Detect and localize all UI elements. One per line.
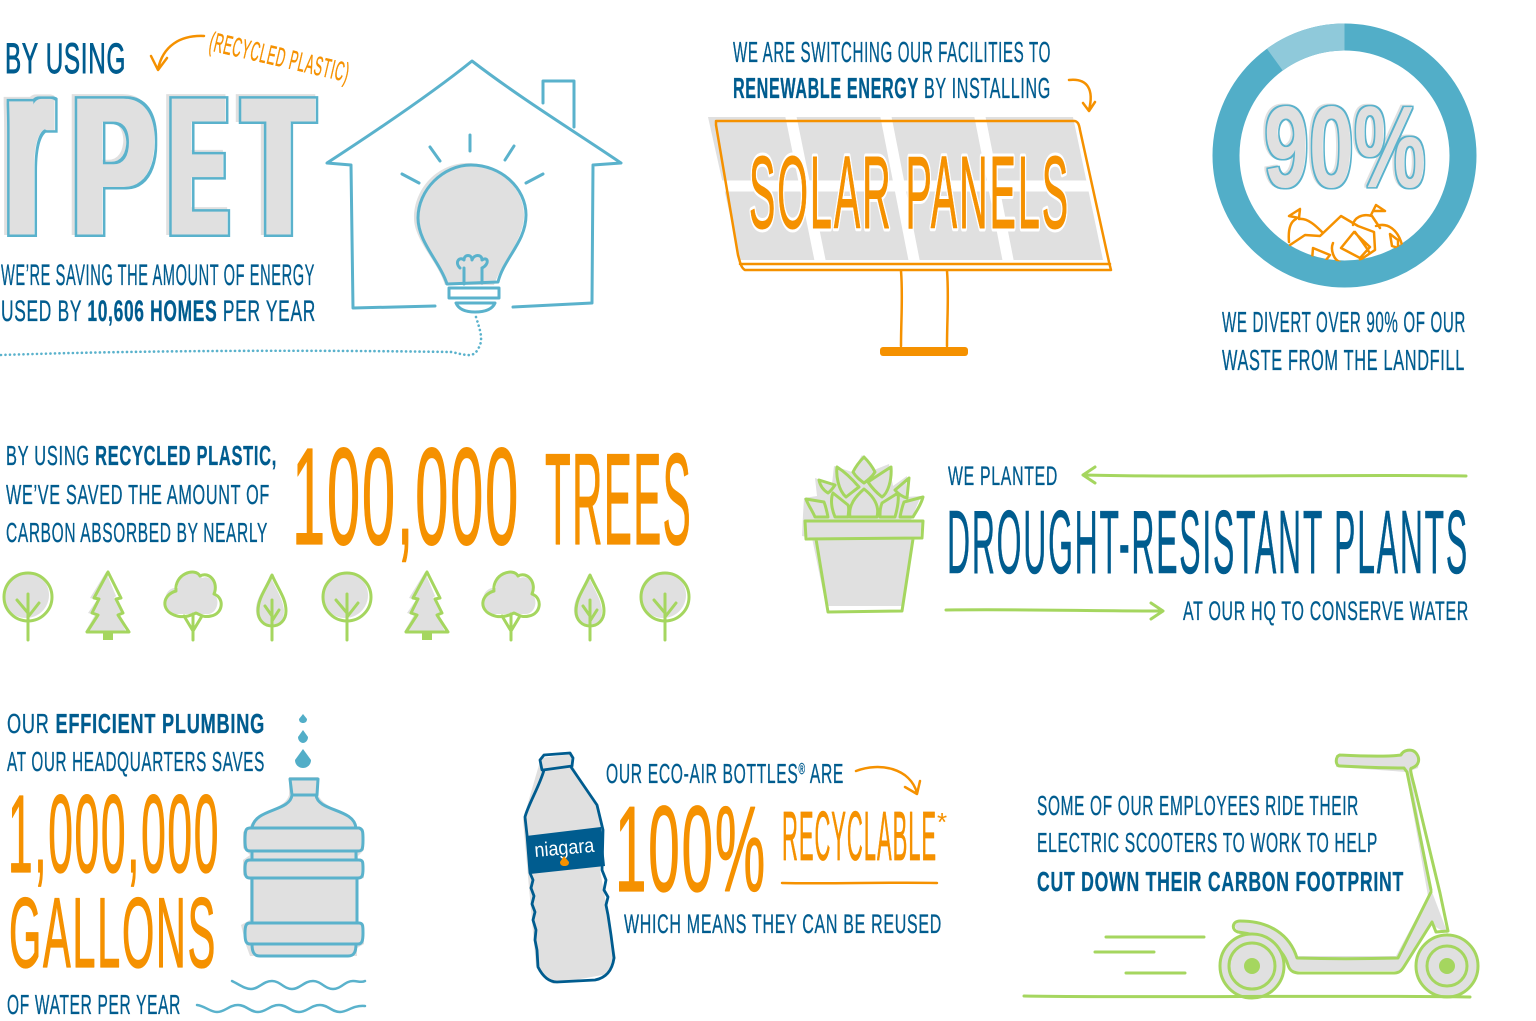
big word rPET: E — [170, 57, 227, 276]
text: efficient plumbing — [7, 708, 265, 777]
text: divert waste — [1222, 307, 1466, 377]
label: solar panels — [749, 135, 1070, 250]
icon: niagara bottle — [523, 753, 616, 984]
icon: potted succulent — [802, 455, 923, 612]
panel: rPET energy savings — [1, 8, 621, 355]
text: employees ride scooters — [1037, 790, 1404, 897]
panel: water saved — [7, 708, 365, 1020]
panel: rPET energy savings: WE’RE SAVING THE AMOUNT OF ENERGY — [1, 259, 315, 292]
motion lines — [1095, 937, 1204, 973]
icon: house — [327, 61, 621, 308]
decoration: water waves — [197, 981, 365, 1012]
arrow: to rPET — [151, 36, 204, 70]
arrow: right — [946, 603, 1163, 619]
text: RECYCLABLE — [782, 797, 937, 875]
arrow: left — [1083, 467, 1466, 483]
panel: 100,000 trees — [3, 420, 692, 640]
chart: 90 percent donut — [1226, 37, 1463, 274]
big word rPET: T — [244, 57, 313, 276]
text: of water per year: OF WATER PER YEAR — [7, 989, 181, 1020]
text: can be reused: WHICH MEANS THEY CAN BE REUSED — [624, 909, 942, 939]
number: 90%: 90% — [1264, 82, 1426, 212]
text: efficient plumbing: AT OUR HEADQUARTERS SAVES — [7, 746, 265, 777]
icon row: trees — [3, 572, 689, 640]
icon: solar panel — [700, 112, 1111, 356]
icon: water jug — [241, 777, 364, 956]
big word rPET: r — [5, 8, 53, 287]
icon: scooter — [1219, 749, 1478, 999]
arrow: to solar panels — [1069, 80, 1095, 111]
text: switching to renewable energy: RENEWABLE ENERGY BY INSTALLING — [733, 73, 1051, 105]
text: switching to renewable energy — [733, 37, 1051, 105]
icon: trash pile — [1289, 205, 1402, 265]
dotted cord — [1, 317, 481, 355]
panel: landfill diversion — [1222, 37, 1466, 377]
panel: solar panels — [700, 37, 1111, 356]
ground line — [1024, 996, 1470, 997]
text: recycled plastic carbon savings — [6, 440, 277, 548]
icon: niagara bottle: niagara — [534, 835, 596, 862]
text: recycled plastic carbon savings: WE’VE SAVED THE AMOUNT OF — [6, 479, 270, 510]
asterisk: * — [937, 807, 947, 837]
panel: water saved: 1,000,000 — [8, 773, 220, 896]
text: energy saved — [1, 259, 316, 328]
arrow: to recyclable — [856, 767, 920, 794]
big word rPET: P — [73, 57, 155, 276]
underline — [782, 881, 937, 885]
text: efficient plumbing: OUR EFFICIENT PLUMBING — [7, 708, 265, 739]
panel: recyclable bottles: 100% — [615, 781, 767, 917]
panel: drought-resistant plants — [802, 455, 1469, 626]
panel: water saved: GALLONS — [9, 877, 217, 988]
text: eco-air bottles: ® — [798, 761, 806, 778]
text: energy saved: USED BY 10,606 HOMES PER YEAR — [1, 295, 316, 328]
text: eco-air bottles: ARE — [806, 758, 844, 789]
text: recycled plastic carbon savings: BY USING RECYCLED PLASTIC, — [6, 440, 277, 471]
text: switching to renewable energy: WE ARE SWITCHING OUR FACILITIES TO — [733, 37, 1051, 69]
icon: water drops — [295, 714, 311, 768]
text: recycled plastic carbon savings: CARBON ABSORBED BY NEARLY — [6, 517, 268, 548]
number: 100,000 trees: 100,000 — [292, 420, 520, 574]
text: TREES — [545, 426, 692, 572]
text: eco-air bottles: OUR ECO-AIR BOTTLES — [606, 758, 951, 789]
panel: electric scooters — [1024, 749, 1478, 999]
number: 1,000,000 gallons — [8, 773, 220, 988]
big word rPET — [5, 8, 313, 287]
panel: recyclable bottles — [523, 753, 947, 984]
text: we planted: WE PLANTED — [948, 461, 1058, 491]
heading: by using: BY USING — [5, 35, 126, 83]
icon: light bulb — [402, 135, 543, 312]
panel: rPET energy savings: (RECYCLED PLASTIC) — [207, 27, 353, 88]
